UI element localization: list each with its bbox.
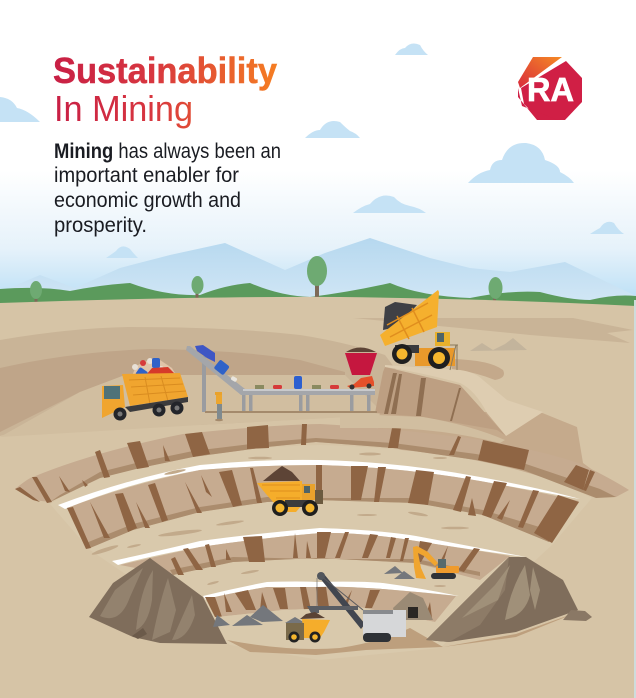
left rock mound — [89, 558, 227, 644]
ledge scuffs — [91, 452, 469, 587]
RA logo: RA — [527, 71, 574, 108]
green hills — [0, 283, 636, 312]
intro text — [54, 140, 281, 237]
truck tipping at top — [380, 290, 458, 370]
ring wall 1 — [15, 424, 629, 503]
sky — [0, 0, 636, 310]
red hopper — [345, 348, 377, 375]
gray ore piles — [213, 566, 415, 627]
title: Sustainability — [53, 50, 277, 91]
conveyor items — [195, 345, 339, 389]
pit floor shadow — [227, 628, 443, 655]
excavator — [413, 546, 459, 579]
white ledge line 2 — [58, 460, 580, 509]
truck middle — [257, 466, 323, 516]
title — [53, 50, 277, 129]
mine pit — [15, 424, 629, 660]
electric mining shovel — [307, 572, 406, 642]
intro text: economic growth and — [54, 189, 241, 212]
ring wall 3 — [120, 532, 510, 580]
ring wall 4 — [205, 587, 456, 622]
RA logo — [518, 57, 582, 120]
worker — [215, 392, 223, 421]
white ledge line 3 — [112, 528, 526, 565]
ring wall 2 — [67, 465, 579, 549]
right rock mound — [426, 557, 592, 647]
intro text: Mining has always been an — [54, 140, 281, 163]
intro text: prosperity. — [54, 214, 147, 237]
ground — [0, 297, 636, 698]
title: In Mining — [54, 88, 193, 129]
cliff with top platform — [340, 365, 543, 443]
intro text: important enabler for — [54, 164, 239, 187]
truck left loaded with recycled items — [102, 358, 188, 420]
upper quarry swaths — [0, 318, 633, 490]
pit floor — [217, 607, 435, 655]
mountains — [0, 238, 636, 310]
trees — [30, 256, 502, 310]
white ledge line 4 — [203, 582, 459, 600]
conveyor belt — [186, 346, 377, 413]
red car — [347, 376, 374, 390]
mine cave — [393, 592, 433, 620]
clouds — [0, 44, 624, 258]
truck bottom — [285, 612, 330, 642]
